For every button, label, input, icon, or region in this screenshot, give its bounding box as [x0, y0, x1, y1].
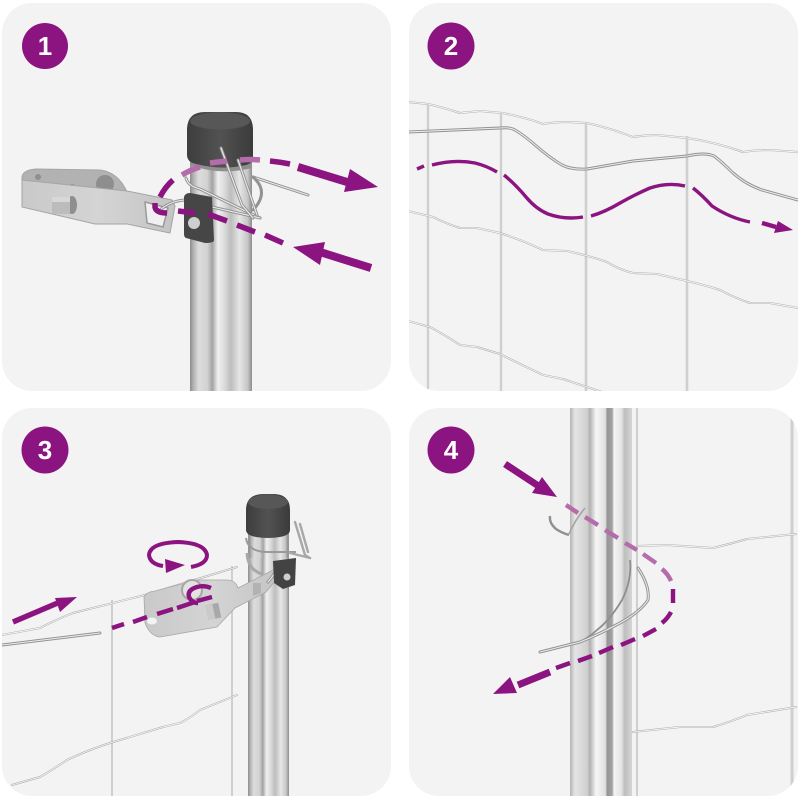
tensioner: [144, 568, 282, 637]
dashed path arrows: [155, 160, 378, 268]
badge 2: [428, 22, 474, 70]
wire hook and pins: [160, 148, 308, 218]
bent wire around post: [540, 508, 648, 652]
dashed path with arrows: [493, 464, 673, 694]
fence horizontal wires: [408, 102, 798, 392]
end cap: [246, 494, 290, 538]
panel: step 4 wrap wire around post: [409, 408, 798, 796]
post: [248, 530, 289, 796]
dashed path and straight arrow: [13, 586, 212, 628]
wire tensioner: [22, 169, 175, 233]
badge 3: [22, 426, 68, 474]
post: [190, 160, 252, 392]
pins: [290, 522, 310, 558]
fence vertical wires: [428, 103, 687, 392]
panel: step 1 attach tensioner to post: [2, 3, 391, 391]
fence wires: [2, 566, 237, 796]
dashed purple path with arrow: [417, 161, 793, 233]
badge 1: 1: [38, 31, 52, 61]
badge 4: 4: [444, 435, 459, 465]
end cap: [187, 112, 253, 168]
clamp: [184, 193, 214, 243]
rotation arrow: [149, 542, 207, 573]
badge 3: 3: [38, 435, 52, 465]
badge 4: [428, 426, 474, 474]
badge 2: 2: [444, 31, 458, 61]
panel: step 2 thread wire along fence: [409, 3, 798, 391]
collar on post: [246, 530, 296, 574]
clamp: [268, 558, 296, 589]
panel: step 3 tighten tensioner: [2, 408, 391, 796]
post: [570, 408, 632, 796]
badge 1: [22, 23, 68, 69]
fence wires: [633, 408, 796, 796]
